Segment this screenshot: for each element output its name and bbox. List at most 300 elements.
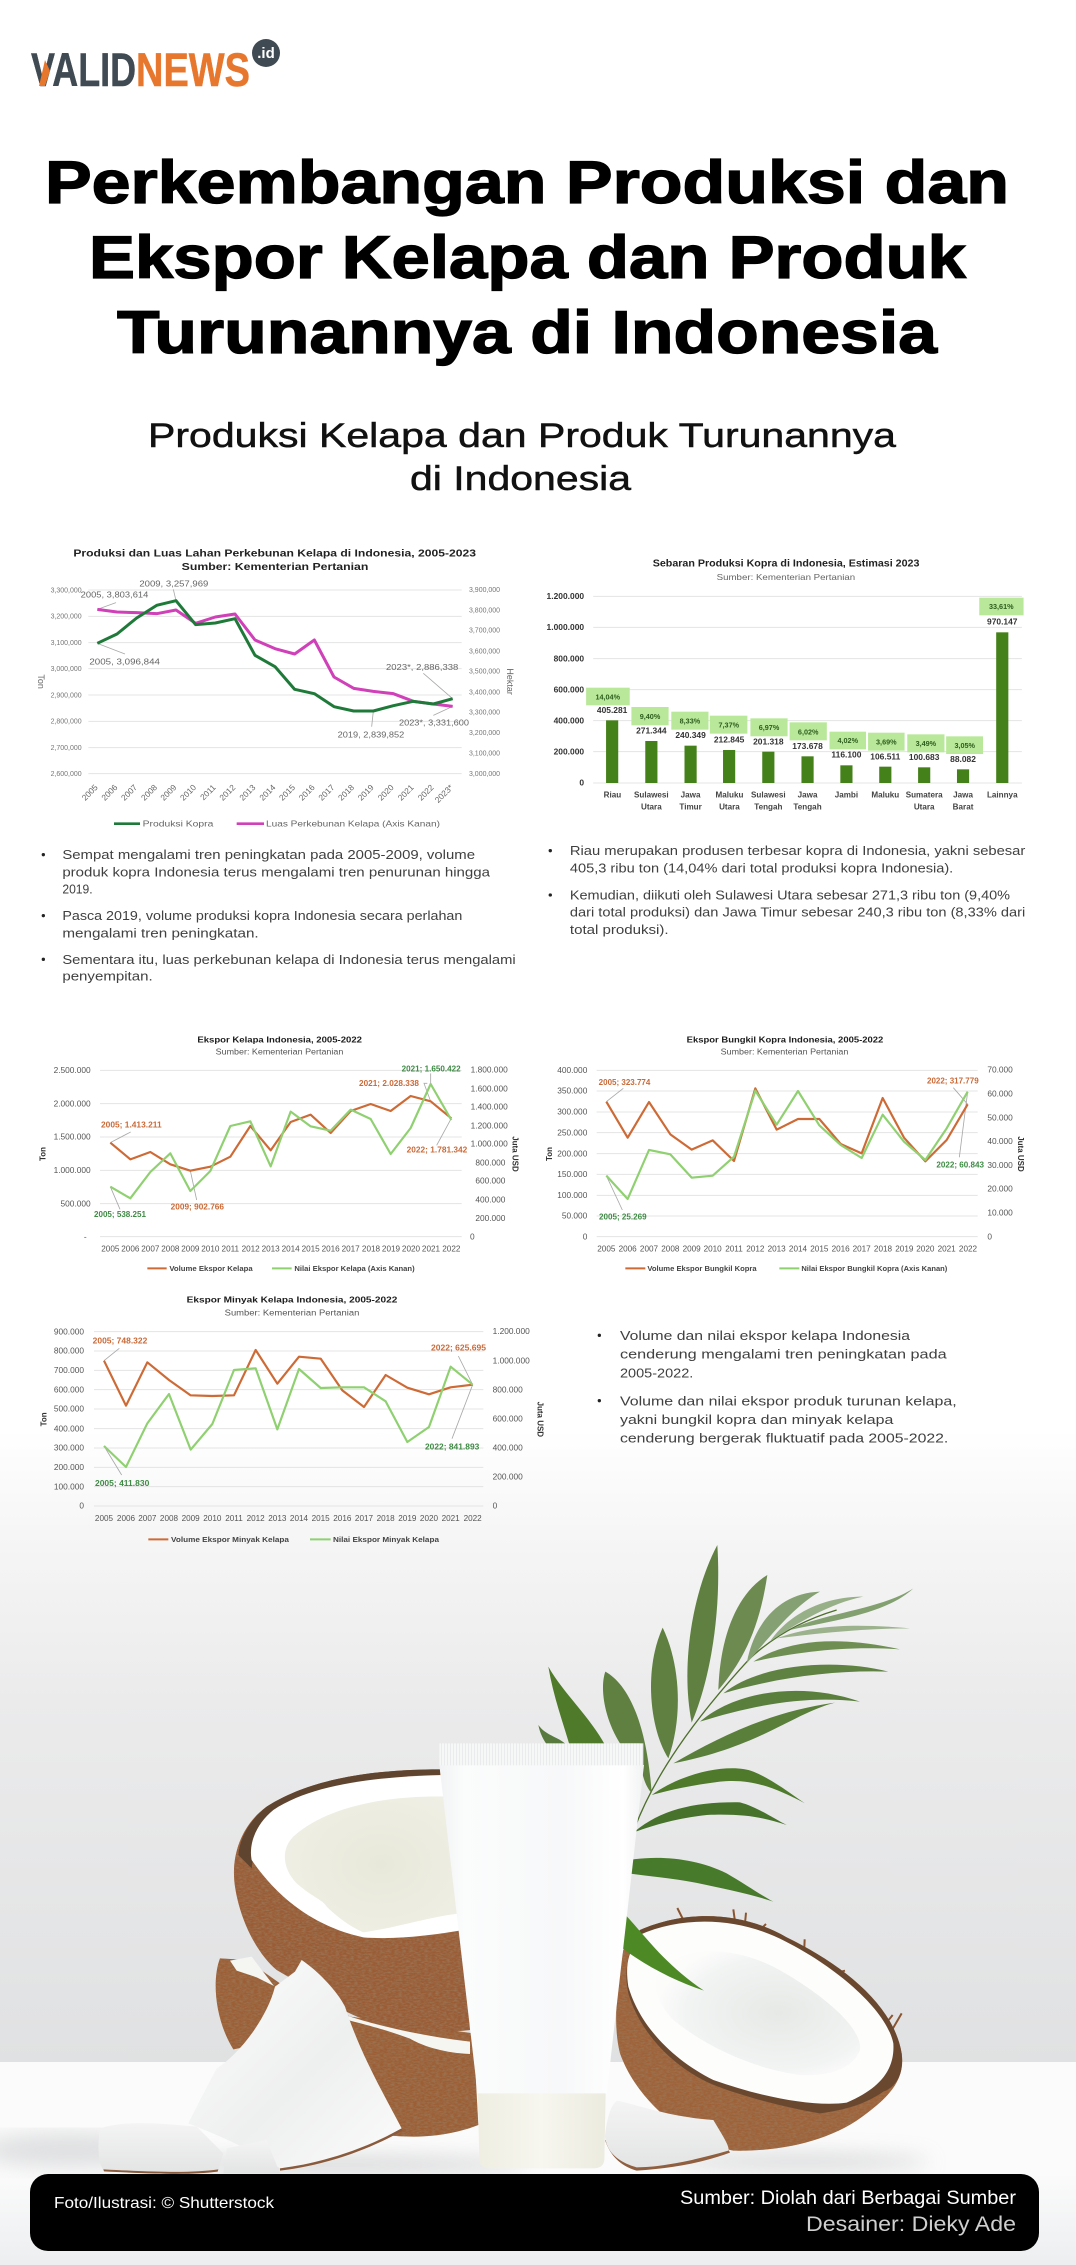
percentage values: 33,61% [989, 602, 1014, 611]
panel: production and plantation area chart [36, 549, 516, 984]
chart title: Produksi dan Luas Lahan Perkebunan Kelapa di Indonesia, 2005-2023 [73, 549, 477, 560]
text block: export notes: cenderung bergerak fluktuatif pada 2005-2022. [620, 1431, 948, 1446]
right axis labels: 600.000 [493, 1413, 523, 1423]
year labels: 2017 [853, 1244, 871, 1253]
left axis labels: 3,000,000 [51, 666, 82, 673]
year labels: 2011 [225, 1514, 243, 1523]
percentage values: 6,02% [798, 727, 819, 736]
year labels: 2014 [282, 1244, 300, 1253]
bar values: 100.683 [909, 752, 940, 762]
data labels: 2005; 538.251 [94, 1209, 146, 1219]
left axis labels: 2,900,000 [51, 692, 82, 699]
right axis labels: 600.000 [475, 1176, 506, 1186]
year labels: 2005 [597, 1244, 616, 1253]
category labels: Jawa [953, 791, 973, 800]
chart title [73, 549, 477, 573]
footer bar [30, 2174, 1039, 2251]
y axis labels: 400.000 [554, 715, 584, 725]
right axis labels: 1.000.000 [471, 1139, 508, 1149]
year labels: 2006 [117, 1514, 136, 1523]
year labels: 2018 [336, 782, 356, 803]
legend: Luas Perkebunan Kelapa (Axis Kanan) [266, 819, 440, 829]
year labels: 2014 [789, 1244, 808, 1253]
year labels: 2009 [158, 782, 179, 803]
photo credit: Foto/Ilustrasi: © Shutterstock [54, 2195, 275, 2212]
bar values [597, 617, 1018, 764]
upper coconut meat [251, 1775, 463, 1938]
percentage values: 3,69% [876, 737, 897, 746]
tube crimp [439, 1743, 643, 1765]
y axis labels: 200.000 [554, 746, 584, 756]
text block: production notes [42, 847, 516, 984]
axis titles: Juta USD [535, 1402, 544, 1437]
upper coconut hollow [285, 1796, 460, 1932]
chart title: Sumber: Kementerian Pertanian [216, 1048, 343, 1057]
right axis labels: 3,500,000 [469, 669, 500, 676]
left axis labels: 600.000 [54, 1384, 84, 1394]
left axis labels: 3,100,000 [51, 640, 82, 647]
bar values: 116.100 [831, 750, 862, 760]
year labels: 2013 [768, 1244, 786, 1253]
right axis labels: 1.000.000 [493, 1355, 530, 1365]
year labels: 2005 [95, 1514, 114, 1523]
text block: production notes: produk kopra Indonesia terus mengalami tren penurunan hingga [62, 865, 491, 880]
right axis labels: 400.000 [493, 1442, 523, 1452]
category labels: Barat [953, 802, 974, 811]
year labels: 2016 [297, 782, 317, 803]
section subtitle [148, 417, 896, 498]
year labels: 2006 [619, 1244, 637, 1253]
panel: copra production distribution bar chart [547, 559, 1026, 937]
right axis labels: 3,400,000 [469, 689, 500, 696]
category labels: Jambi [835, 791, 858, 800]
line: export value [110, 1084, 451, 1198]
percentage values: 8,33% [680, 716, 701, 725]
data labels: 2005; 411.830 [95, 1478, 150, 1488]
year labels: 2008 [139, 782, 159, 803]
chart title [653, 559, 920, 582]
text block: export notes [598, 1328, 957, 1446]
right axis labels [469, 587, 500, 778]
year labels: 2021 [422, 1244, 441, 1253]
category labels: Sumatera [906, 791, 943, 800]
coconut wedge [188, 1960, 402, 2168]
year labels: 2014 [257, 782, 278, 803]
axis titles [40, 1402, 544, 1437]
panel: coconut oil export chart [40, 1295, 544, 1544]
photo: palm frond [538, 1545, 913, 1991]
bar values: 106.511 [870, 751, 901, 761]
text block: distribution notes: 405,3 ribu ton (14,04% dari total produksi kopra Indonesia). [570, 860, 953, 875]
left axis labels: 3,200,000 [51, 614, 82, 621]
year labels: 2012 [217, 782, 238, 803]
data labels [81, 579, 469, 739]
year labels: 2005 [101, 1244, 120, 1253]
category labels: Tengah [754, 802, 783, 811]
right axis labels: 0 [987, 1231, 992, 1241]
photo: stacked coconut halves [216, 1769, 478, 2137]
lower coconut shell [216, 1958, 478, 2137]
legend: Produksi Kopra [143, 819, 214, 829]
y axis labels [547, 591, 584, 788]
bar values: 173.678 [792, 741, 823, 751]
right axis labels: 0 [493, 1501, 498, 1511]
y axis labels: 800.000 [554, 653, 584, 663]
percentage callouts [586, 598, 1024, 754]
shell spikes [677, 1908, 902, 2033]
right axis labels: 3,200,000 [469, 730, 500, 737]
year labels: 2015 [302, 1244, 320, 1253]
data labels: 2009, 3,257,969 [139, 579, 209, 589]
left axis labels: 400.000 [54, 1423, 84, 1433]
year labels: 2011 [222, 1244, 240, 1253]
year labels: 2012 [242, 1244, 260, 1253]
percentage values: 3,49% [916, 739, 937, 748]
bar values: 271.344 [636, 726, 667, 736]
right axis labels: 10.000 [987, 1208, 1013, 1218]
text block: production notes: mengalami tren peningkatan. [62, 925, 259, 940]
year labels: 2006 [99, 782, 120, 803]
year labels: 2018 [377, 1514, 395, 1523]
year labels: 2007 [119, 782, 139, 803]
data labels: 2019, 2,839,852 [338, 729, 405, 739]
category labels: Sulawesi [634, 791, 669, 800]
year labels: 2016 [322, 1244, 340, 1253]
year labels: 2007 [141, 1244, 160, 1253]
right axis labels: 60.000 [987, 1088, 1013, 1098]
line: export volume [104, 1350, 473, 1407]
year labels: 2021 [938, 1244, 956, 1253]
shell rim [626, 1916, 902, 2113]
left axis labels: 2,600,000 [51, 771, 82, 778]
year labels: 2017 [355, 1514, 374, 1523]
year labels: 2009 [182, 1514, 200, 1523]
year labels: 2008 [661, 1244, 680, 1253]
year labels: 2016 [832, 1244, 850, 1253]
chart title: Sumber: Kementerian Pertanian [225, 1308, 359, 1317]
text block: export notes: yakni bungkil kopra dan minyak kelapa [620, 1412, 894, 1427]
data labels: 2023*, 3,331,600 [399, 718, 469, 728]
source: Sumber: Diolah dari Berbagai Sumber [680, 2188, 1017, 2209]
photo: table shadows [0, 2132, 930, 2174]
left axis labels: 900.000 [54, 1326, 84, 1336]
data labels: 2022; 60.843 [936, 1160, 984, 1170]
year labels: 2014 [290, 1514, 309, 1523]
left axis labels: 2.000.000 [54, 1098, 91, 1108]
left axis labels: 300.000 [54, 1443, 84, 1453]
left axis labels: 200.000 [54, 1462, 84, 1472]
bar values: 201.318 [753, 737, 784, 747]
text block: export notes: cenderung mengalami tren peningkatan pada [620, 1347, 947, 1362]
category labels: Sulawesi [751, 791, 786, 800]
year labels: 2021 [396, 782, 416, 803]
year labels: 2007 [640, 1244, 659, 1253]
small chunk rind [103, 2169, 218, 2174]
tube cap [478, 2093, 606, 2168]
year labels: 2012 [746, 1244, 765, 1253]
percentage values: 6,97% [759, 723, 780, 732]
bar values: 405.281 [597, 705, 628, 715]
category labels: Utara [641, 802, 662, 811]
axis titles: Ton [36, 674, 46, 689]
right axis labels [493, 1326, 530, 1511]
left axis labels: 250.000 [557, 1127, 588, 1137]
left axis labels: 500.000 [54, 1404, 84, 1414]
text block: distribution notes: total produksi). [570, 922, 669, 937]
year labels: 2005 [80, 782, 100, 803]
small coconut chunk [223, 2140, 280, 2173]
left axis labels [51, 587, 82, 778]
chart title: Ekspor Kelapa Indonesia, 2005-2022 [197, 1035, 362, 1045]
designer: Desainer: Dieky Ade [806, 2213, 1016, 2236]
year labels: 2019 [356, 782, 376, 803]
right axis labels: 3,900,000 [469, 587, 500, 594]
year labels: 2017 [316, 782, 337, 803]
year labels: 2019 [382, 1244, 401, 1253]
left axis labels [557, 1065, 588, 1241]
line: export value [104, 1367, 473, 1467]
right axis labels: 200.000 [475, 1213, 506, 1223]
category labels: Utara [914, 802, 935, 811]
text block: distribution notes: Riau merupakan produsen terbesar kopra di Indonesia, yakni sebesar [570, 843, 1026, 858]
text block: production notes: penyempitan. [62, 969, 153, 984]
title: Turunannya di Indonesia [117, 299, 938, 366]
photo: right coconut half [616, 1908, 902, 2151]
year labels: 2008 [160, 1514, 179, 1523]
y axis labels: 1.200.000 [547, 591, 584, 601]
year labels: 2007 [138, 1514, 157, 1523]
text block: distribution notes [549, 843, 1026, 937]
category labels [604, 791, 1018, 811]
category labels: Lainnya [987, 791, 1018, 800]
chart title [197, 1035, 362, 1057]
legend [625, 1264, 948, 1273]
data labels: 2023*, 2,886,338 [386, 662, 459, 672]
legend [148, 1535, 440, 1544]
year labels: 2013 [237, 782, 258, 803]
chart title: Sebaran Produksi Kopra di Indonesia, Estimasi 2023 [653, 559, 920, 570]
right axis labels: 400.000 [475, 1194, 506, 1204]
text block: export notes: Volume dan nilai ekspor produk turunan kelapa, [620, 1393, 957, 1408]
line: coconut plantation area [97, 609, 453, 706]
year labels: 2018 [874, 1244, 893, 1253]
text block: export notes: 2005-2022. [620, 1365, 693, 1380]
left axis labels: 0 [79, 1501, 84, 1511]
left axis labels: 2,700,000 [51, 745, 82, 752]
section subtitle: di Indonesia [410, 460, 631, 498]
left axis labels: 1.000.000 [54, 1165, 91, 1175]
lower coconut meat [230, 1957, 470, 2054]
year labels: 2008 [161, 1244, 180, 1253]
category labels: Jawa [798, 791, 818, 800]
axis titles: Ton [39, 1147, 48, 1161]
left axis labels: 50.000 [562, 1211, 588, 1221]
year labels: 2019 [895, 1244, 914, 1253]
year labels: 2020 [916, 1244, 935, 1253]
right axis labels: 200.000 [493, 1471, 523, 1481]
year labels: 2011 [725, 1244, 743, 1253]
text block: distribution notes: Kemudian, diikuti oleh Sulawesi Utara sebesar 271,3 ribu ton (9,40% [570, 887, 1010, 902]
axis titles: Juta USD [511, 1136, 520, 1172]
category labels: Maluku [715, 791, 743, 800]
data labels: 2005; 748.322 [93, 1335, 148, 1345]
year labels: 2015 [810, 1244, 829, 1253]
category labels: Timur [679, 802, 703, 811]
logo: Validnews.id: VALID [31, 43, 136, 96]
text block: production notes: 2019. [62, 881, 93, 896]
text block: production notes: Pasca 2019, volume produksi kopra Indonesia secara perlahan [62, 908, 462, 923]
small coconut chunk [99, 2123, 223, 2172]
year labels: 2015 [312, 1514, 330, 1523]
right axis labels: 40.000 [987, 1136, 1013, 1146]
legend: Nilai Ekspor Minyak Kelapa [333, 1535, 440, 1544]
left axis labels: 700.000 [54, 1365, 84, 1375]
line: export volume [110, 1096, 451, 1171]
year labels: 2013 [262, 1244, 280, 1253]
year labels: 2022 [442, 1244, 461, 1253]
year labels: 2018 [362, 1244, 381, 1253]
legend: Volume Ekspor Minyak Kelapa [171, 1535, 290, 1544]
percentage values [595, 602, 1014, 750]
bar values: 88.082 [950, 754, 976, 764]
right axis labels: 3,800,000 [469, 607, 500, 614]
background photo: wall and table [0, 1430, 1076, 2265]
year labels [101, 1244, 461, 1253]
axis titles [39, 1136, 520, 1172]
panel: copra meal export chart [545, 1035, 1025, 1273]
y axis labels: 1.000.000 [547, 622, 584, 632]
logo: Validnews.id: .id [257, 45, 275, 62]
data labels: 2005; 1.413.211 [101, 1119, 162, 1129]
left axis labels: 300.000 [557, 1107, 588, 1117]
right axis labels: 3,100,000 [469, 751, 500, 758]
data labels: 2005, 3,096,844 [89, 656, 160, 666]
text block: production notes: Sempat mengalami tren peningkatan pada 2005-2009, volume [62, 847, 475, 862]
left axis labels [54, 1065, 91, 1241]
right axis labels: 1.600.000 [471, 1083, 508, 1093]
photo: white cosmetic tube [99, 1743, 644, 2174]
y axis labels: 600.000 [554, 684, 584, 694]
upper coconut rim [238, 1769, 440, 1868]
panel: coconut export chart [39, 1035, 520, 1273]
coconut meat [627, 1922, 893, 2104]
title: Perkembangan Produksi dan [45, 149, 1009, 216]
category labels: Utara [719, 802, 740, 811]
data labels: 2005; 25.269 [599, 1212, 647, 1222]
year labels: 2019 [398, 1514, 417, 1523]
year labels: 2022 [959, 1244, 978, 1253]
year labels: 2012 [247, 1514, 265, 1523]
right axis labels [470, 1065, 508, 1241]
legend: Volume Ekspor Kelapa [169, 1264, 253, 1273]
year labels: 2020 [420, 1514, 439, 1523]
data labels [94, 1064, 468, 1219]
legend: Nilai Ekspor Kelapa (Axis Kanan) [294, 1264, 415, 1273]
left axis labels [54, 1326, 84, 1511]
axis titles [36, 668, 515, 695]
text block: production notes: Sementara itu, luas perkebunan kelapa di Indonesia terus mengalami [62, 952, 516, 967]
left axis labels: 350.000 [557, 1086, 588, 1096]
right axis labels [987, 1065, 1013, 1241]
year labels: 2009 [683, 1244, 701, 1253]
bars [606, 632, 1008, 783]
left axis labels: 200.000 [557, 1148, 588, 1158]
year labels: 2020 [376, 782, 396, 803]
category labels: Tengah [793, 802, 822, 811]
wedge rind [280, 2128, 403, 2171]
year labels: 2015 [277, 782, 297, 803]
chart title: Sumber: Kementerian Pertanian [721, 1048, 848, 1057]
chart title: Ekspor Minyak Kelapa Indonesia, 2005-2022 [187, 1295, 398, 1305]
year labels: 2023* [433, 782, 456, 805]
year labels: 2010 [178, 782, 198, 803]
year labels [80, 782, 456, 805]
legend: Nilai Ekspor Bungkil Kopra (Axis Kanan) [801, 1264, 948, 1273]
legend [114, 819, 440, 829]
left axis labels: 100.000 [557, 1190, 588, 1200]
axis titles: Hektar [505, 668, 515, 695]
right axis labels: 1.400.000 [471, 1102, 508, 1112]
title [45, 149, 1009, 366]
line: export value [606, 1091, 968, 1199]
logo: Validnews.id: NEWS [136, 43, 250, 96]
left axis labels: 2,800,000 [51, 719, 82, 726]
left axis labels: 100.000 [54, 1481, 84, 1491]
line: export volume [606, 1088, 968, 1161]
data labels [599, 1075, 984, 1222]
upper coconut shell [234, 1769, 470, 2032]
axis titles: Ton [545, 1147, 554, 1161]
percentage values: 4,02% [837, 736, 859, 745]
data labels: 2005, 3,803,614 [81, 590, 149, 600]
data labels: 2021; 2.028.338 [359, 1078, 419, 1088]
right axis labels: 20.000 [987, 1184, 1013, 1194]
coconut hollow [656, 1951, 860, 2075]
bar values: 970.147 [987, 617, 1018, 627]
right axis labels: 70.000 [987, 1065, 1013, 1075]
left axis labels: 400.000 [557, 1065, 588, 1075]
y axis labels: 0 [579, 778, 584, 788]
photo: coconut piece beside tube [605, 2101, 730, 2171]
year labels: 2010 [203, 1514, 222, 1523]
left axis labels: 500.000 [61, 1198, 91, 1208]
left axis labels: 0 [583, 1231, 588, 1241]
year labels: 2017 [342, 1244, 360, 1253]
right axis labels: 800.000 [493, 1384, 523, 1394]
right axis labels: 1.200.000 [493, 1326, 530, 1336]
category labels: Jawa [681, 791, 701, 800]
data labels: 2022; 625.695 [431, 1343, 486, 1353]
right axis labels: 3,000,000 [469, 771, 500, 778]
data labels: 2022; 841.893 [425, 1442, 480, 1452]
year labels: 2016 [333, 1514, 352, 1523]
text block: export notes: Volume dan nilai ekspor kelapa Indonesia [620, 1328, 911, 1343]
year labels: 2022 [416, 782, 436, 803]
legend [147, 1264, 415, 1273]
year labels [597, 1244, 978, 1253]
right axis labels: 3,700,000 [469, 628, 500, 635]
year labels: 2021 [442, 1514, 460, 1523]
right axis labels: 50.000 [987, 1112, 1013, 1122]
left axis labels: 3,300,000 [51, 587, 82, 594]
data labels: 2022; 317.779 [927, 1075, 979, 1085]
chart title: Sumber: Kementerian Pertanian [182, 562, 368, 573]
data labels: 2009; 902.766 [171, 1201, 224, 1211]
data labels: 2022; 1.781.342 [407, 1145, 468, 1155]
left axis labels: - [84, 1231, 87, 1241]
year labels: 2011 [198, 782, 218, 802]
bar values: 240.349 [675, 730, 706, 740]
